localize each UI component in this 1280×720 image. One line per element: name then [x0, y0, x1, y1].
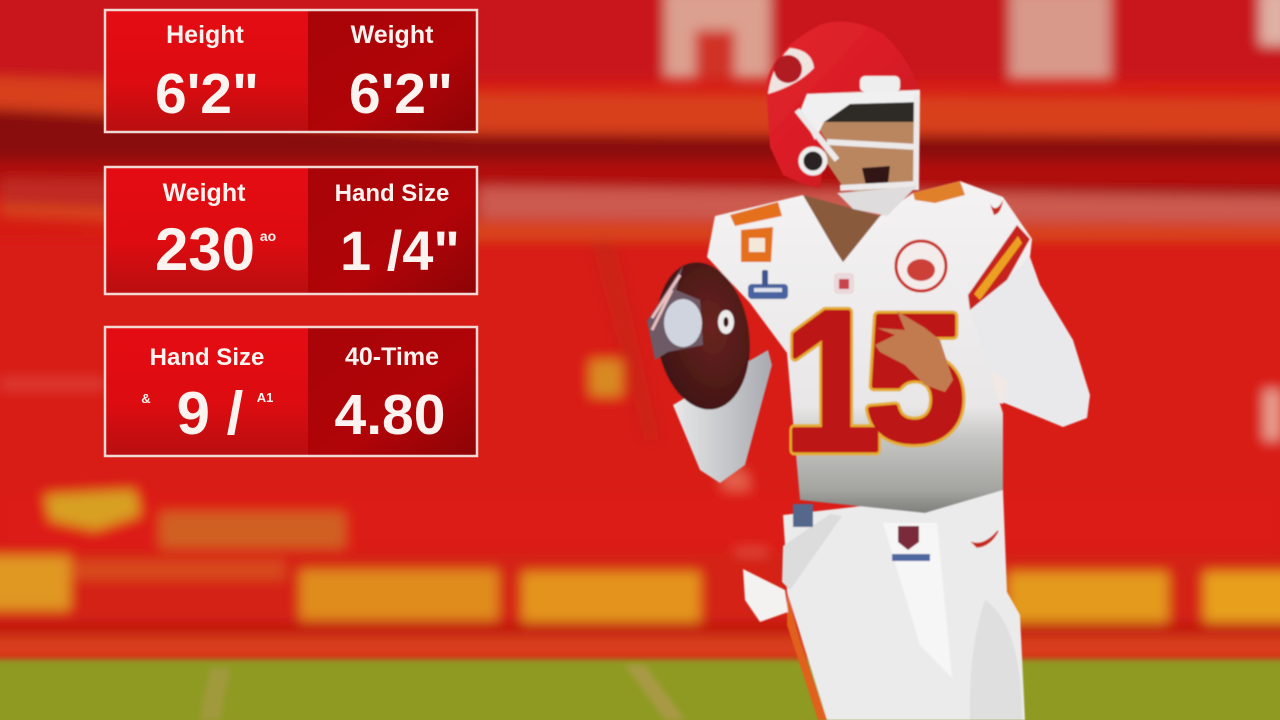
chest shield — [834, 273, 854, 294]
waist text — [892, 554, 930, 561]
label: hand size: Hand Size — [150, 344, 264, 371]
left arm — [673, 350, 772, 483]
small mark right: A1 — [257, 390, 273, 405]
jersey — [707, 181, 1032, 513]
nike logo on pants — [973, 531, 998, 547]
neck — [803, 195, 880, 262]
value: hand size: 9 / — [177, 380, 244, 447]
sleeve patch — [741, 227, 773, 262]
collar number — [913, 181, 965, 203]
helmet — [766, 22, 920, 216]
stat panel 1: height and weight — [105, 10, 477, 132]
jersey number — [783, 270, 965, 493]
chest patch — [896, 241, 946, 291]
throwing hand — [875, 311, 953, 392]
label: height: Height — [166, 21, 245, 49]
chest logo — [748, 270, 788, 299]
jersey number: 5 — [865, 278, 965, 479]
right arm — [950, 257, 1090, 427]
label: weight: Weight — [163, 179, 246, 207]
face — [815, 100, 916, 195]
small mark left: & — [141, 391, 151, 406]
towel — [743, 569, 788, 622]
sleeve stripe — [968, 225, 1030, 310]
label: weight: Weight — [351, 21, 434, 49]
football — [647, 256, 759, 416]
stat panel 2: weight and hand size — [105, 167, 477, 294]
nike logo on shoulder — [990, 200, 1003, 215]
pants — [783, 490, 1025, 720]
football player — [647, 22, 1090, 720]
value: second height: 6'2" — [349, 62, 453, 126]
jersey number: 1 — [783, 270, 881, 493]
label: hand size: Hand Size — [335, 180, 449, 207]
belt patch — [793, 504, 813, 527]
unit: weight: ao — [260, 228, 276, 244]
label: 40 time: 40-Time — [345, 343, 439, 371]
waist shield — [898, 526, 919, 550]
value: height: 6'2" — [155, 62, 259, 126]
jersey number: 1 — [783, 270, 881, 493]
shoulder number — [730, 202, 782, 226]
jersey number: 5 — [865, 278, 965, 479]
value: weight: 230 — [155, 216, 255, 283]
stat panel 3: hand size and 40 time — [105, 327, 477, 456]
value: hand size fraction: 1 /4" — [340, 219, 460, 282]
value: 40 time: 4.80 — [335, 383, 445, 447]
